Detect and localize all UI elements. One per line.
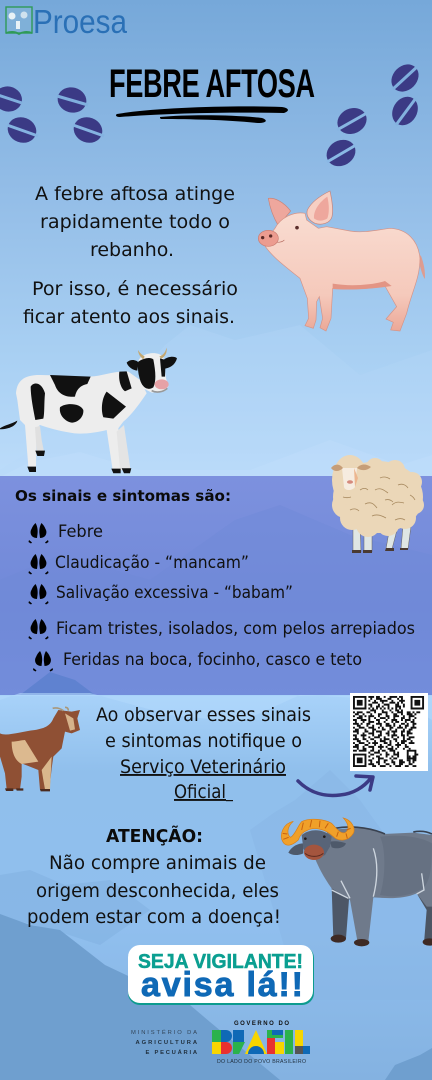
text block: warning: Não compre animais de: [49, 852, 266, 874]
badge: Seja vigilante: SEJA VIGILANTE!: [138, 951, 303, 973]
symptom: sad, isolated: Ficam tristes, isolados, com pelos arrepiados: [56, 619, 415, 638]
BRASIL wordmark: [212, 1030, 310, 1054]
illustration: buffalo: [281, 818, 432, 946]
logo: Proesa: [6, 3, 128, 40]
hoofprints: right trail: [322, 59, 424, 171]
text block: warning: ATENÇÃO:: [106, 824, 203, 847]
text block: intro: A febre aftosa atinge: [35, 183, 235, 205]
heading: Os sinais e sintomas são:: [15, 487, 231, 505]
symptom: fever: Febre: [58, 522, 103, 541]
symptom: salivation: Salivação excessiva - “babam”: [56, 583, 293, 602]
text block: intro: rapidamente todo o: [40, 211, 230, 233]
title: FEBRE AFTOSA: [109, 62, 315, 106]
government of Brazil logo: GOVERNO DO: [234, 1021, 289, 1027]
badge: Seja vigilante: avisa lá!!: [141, 966, 303, 1004]
symptom: lameness: Claudicação - “mancam”: [55, 553, 249, 572]
symptom: wounds: Feridas na boca, focinho, casco e teto: [63, 650, 362, 669]
ministry credit: MINISTÉRIO DA: [131, 1029, 197, 1036]
ministry credit: E PECUÁRIA: [146, 1049, 198, 1056]
text block: warning: podem estar com a doença!: [27, 906, 281, 928]
QR code: [350, 693, 428, 771]
text block: intro: [23, 183, 238, 328]
ministry credit: AGRICULTURA: [136, 1040, 198, 1046]
illustration: cow: [0, 348, 177, 473]
text block: intro: rebanho.: [90, 239, 174, 261]
badge: Seja vigilante: [128, 945, 314, 1005]
text block: intro: ficar atento aos sinais.: [23, 306, 235, 328]
government of Brazil logo: [212, 1021, 310, 1065]
text block: notify: Serviço Veterinário: [120, 756, 286, 778]
ministry credit: [131, 1029, 198, 1056]
text block: warning: [27, 824, 281, 928]
text block: notify: e sintomas notifique o: [105, 730, 302, 752]
illustration: pig: [258, 191, 425, 331]
text block: notify: Oficial: [174, 781, 226, 803]
illustration: goat: [0, 707, 80, 791]
illustration: sheep: [331, 455, 424, 553]
text block: notify: Ao observar esses sinais: [96, 704, 311, 726]
icon: book logo: [6, 7, 32, 34]
government of Brazil logo: DO LADO DO POVO BRASILEIRO: [217, 1059, 306, 1065]
arrow to QR code: [298, 776, 373, 795]
hoofprints: left trail: [0, 84, 106, 147]
title brush underline: [116, 106, 288, 123]
text block: notify: [96, 704, 311, 803]
panel: signs and symptoms: [15, 487, 415, 672]
text block: warning: origem desconhecida, eles: [36, 880, 279, 902]
symptom: fever: [28, 522, 103, 544]
logo wordmark: Proesa: [33, 3, 128, 40]
text block: intro: Por isso, é necessário: [32, 278, 238, 300]
